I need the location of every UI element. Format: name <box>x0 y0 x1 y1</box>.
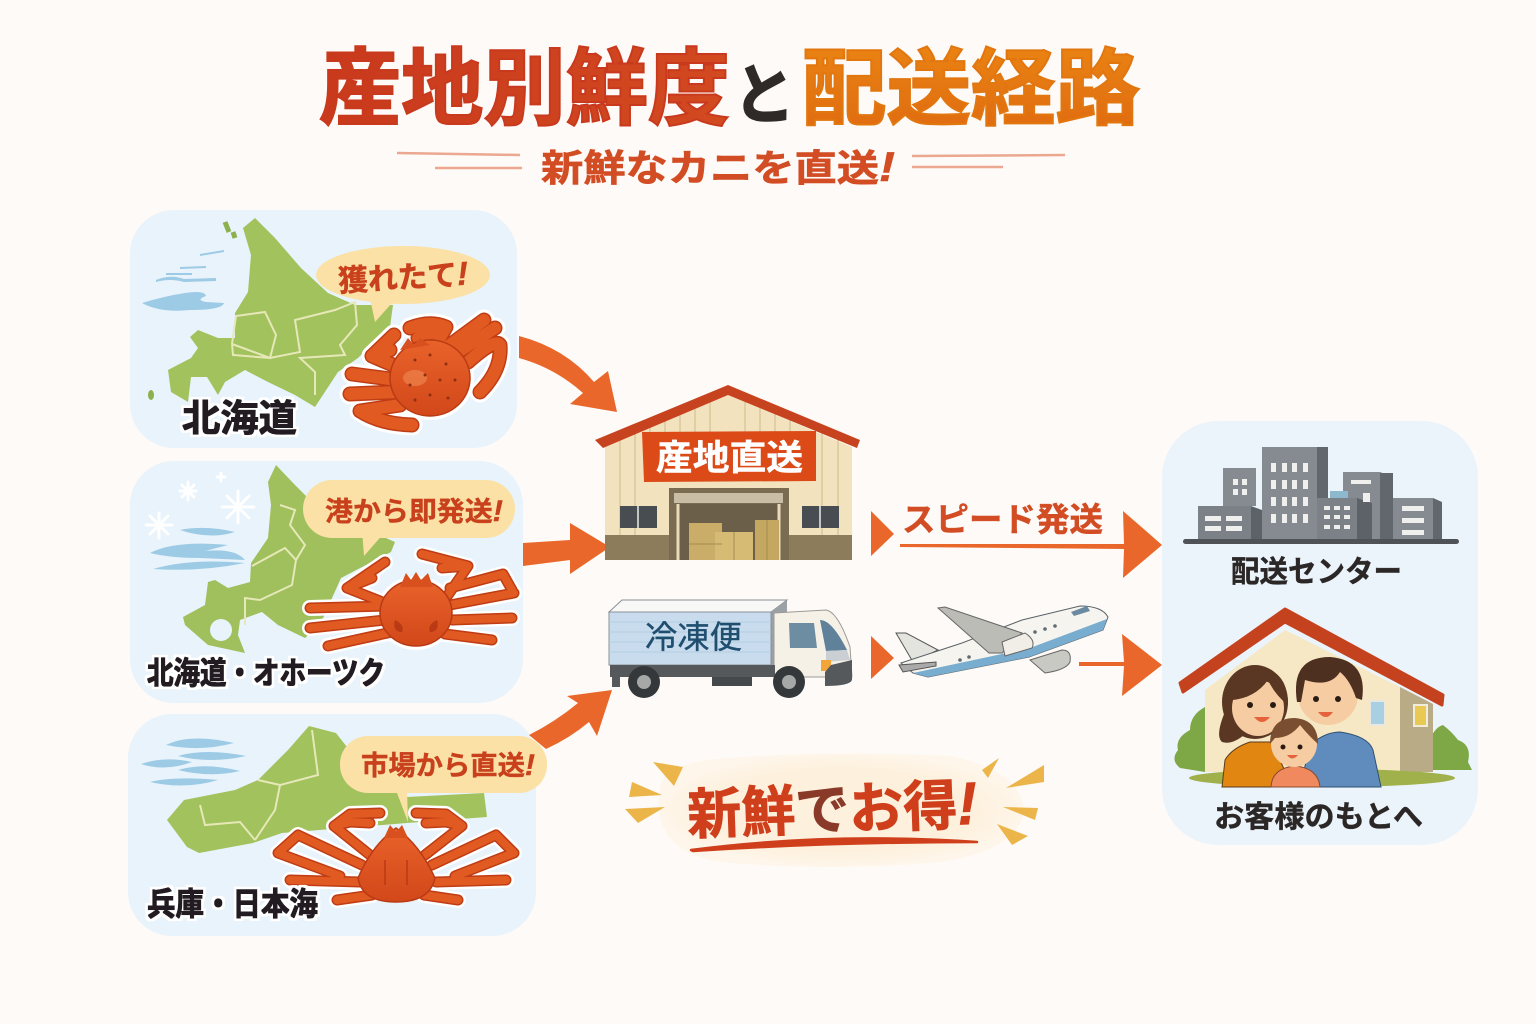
panel: 北海道 <box>130 210 517 448</box>
map: Hyogo <box>167 726 487 853</box>
arrow: Okhotsk to warehouse <box>523 523 610 574</box>
panel: 北海道・オホーツク <box>130 461 523 703</box>
icon: crab <box>350 320 500 425</box>
speech bubble: 港から即発送: 港から即発送! <box>325 495 503 528</box>
arrow: speed shipping to distribution center <box>900 511 1162 578</box>
banner <box>642 431 816 482</box>
map: Hokkaido <box>148 218 393 407</box>
label: 兵庫・日本海: 兵庫・日本海 <box>147 886 318 922</box>
truck <box>609 600 852 698</box>
promo badge: 新鮮でお得 <box>625 753 1044 867</box>
warehouse <box>595 385 860 560</box>
banner: 産地直送 <box>656 439 803 478</box>
sea waves <box>150 528 245 570</box>
label: スピード発送: スピード発送 <box>902 501 1103 538</box>
title: 産地別鮮度 <box>319 42 730 136</box>
arrow: Hokkaido to warehouse <box>519 336 617 412</box>
burst rays <box>625 758 1044 845</box>
triangle arrow: truck to plane <box>871 636 894 679</box>
speech bubble: 港から即発送 <box>303 480 515 556</box>
speech bubble: 市場から直送: 市場から直送! <box>361 749 535 782</box>
title <box>319 42 1140 136</box>
label: お客様のもとへ: お客様のもとへ <box>1214 801 1423 834</box>
panel: destinations <box>1162 421 1478 845</box>
label: 北海道・オホーツク: 北海道・オホーツク <box>147 656 385 691</box>
icon: zuwai crab <box>278 813 514 902</box>
speech bubble: 市場から直送 <box>340 736 547 822</box>
snowflakes <box>146 473 254 538</box>
subtitle: 新鮮なカニを直送 ! <box>541 143 895 190</box>
panel: 兵庫・日本海 <box>128 714 547 936</box>
title: と <box>733 58 795 132</box>
speech bubble: 獲れたて <box>316 246 490 322</box>
promo badge: 新鮮でお得: 新鮮でお得! <box>686 770 978 847</box>
icon: distribution center buildings <box>1183 447 1459 544</box>
man <box>1296 657 1381 787</box>
airplane <box>896 606 1108 677</box>
sea waves <box>142 250 224 311</box>
icon: snow crab <box>310 554 514 650</box>
arrow: plane to home <box>1079 634 1162 696</box>
triangle arrow: warehouse to speed shipping <box>871 511 894 556</box>
label: 北海道: 北海道 <box>182 398 297 439</box>
label: 配送センター: 配送センター <box>1231 556 1402 589</box>
subtitle <box>397 143 1065 190</box>
sea waves <box>141 738 246 786</box>
arrow: Hyogo to truck <box>529 690 612 749</box>
speech bubble: 獲れたて: 獲れたて! <box>337 255 469 298</box>
bushes <box>1174 707 1472 772</box>
map: Hokkaido Okhotsk <box>183 465 395 653</box>
cargo label: 冷凍便 <box>645 619 742 655</box>
illustration: family and house <box>1174 609 1472 787</box>
title: 配送経路 <box>802 42 1140 136</box>
woman <box>1219 665 1292 787</box>
child <box>1270 718 1320 787</box>
